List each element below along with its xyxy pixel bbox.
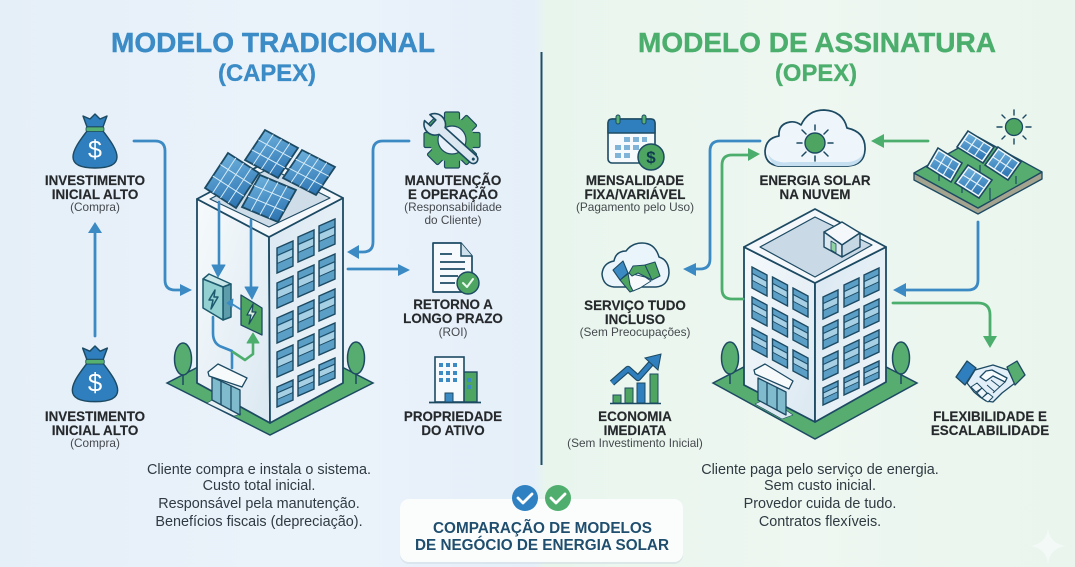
label: retorno: RETORNO A [413,297,493,312]
label: retorno: (ROI) [439,325,467,339]
label: mensalidade: FIXA/VARIÁVEL [585,187,685,202]
trees [174,342,364,385]
label: investimento inicial: INVESTIMENTO [45,173,145,188]
ground [713,330,917,439]
centre divider [540,52,542,465]
label: manutenção: MANUTENÇÃO [405,173,501,188]
building walls [744,209,886,422]
text block: traditional summary: Benefícios fiscais (depreciação). [155,514,363,530]
text block: subscription summary: Provedor cuida de tudo. [744,496,896,512]
building walls [197,160,343,423]
title: traditional model: MODELO TRADICIONAL [111,27,435,58]
icon: document with check [433,243,479,294]
icon: handshake [956,361,1025,402]
label: economia: IMEDIATA [604,423,667,438]
icon: money bag: $ [88,136,102,164]
label: manutenção: E OPERAÇÃO [408,187,498,202]
label: flexibilidade: ESCALABILIDADE [931,423,1049,438]
icon: money bag [73,114,117,168]
label: manutenção: do Cliente) [424,213,482,227]
sparkle mark [1030,528,1066,564]
label: energia solar na nuvem: ENERGIA SOLAR [759,173,871,188]
icon: office property [429,357,481,402]
label: investimento inicial lower [45,409,145,450]
bottom comparison card: COMPARAÇÃO DE MODELOS [433,519,652,537]
entrance [207,364,247,416]
meter box [241,295,262,335]
label: investimento inicial [45,173,145,214]
label: energia solar na nuvem: NA NUVEM [780,187,850,202]
icon: sun [997,110,1031,144]
panel: traditional building [167,130,373,435]
title: traditional model [111,27,435,87]
label: mensalidade: (Pagamento pelo Uso) [576,200,694,214]
title: subscription model: (OPEX) [775,60,857,87]
icon: money bag lower: $ [88,369,102,397]
label: investimento inicial: (Compra) [70,200,120,214]
windows [752,267,879,405]
text block: traditional summary: Responsável pela manutenção. [158,496,360,512]
icon: gear and wrench [420,110,484,170]
label: investimento inicial lower: INVESTIMENTO [45,409,145,424]
entrance [754,364,793,419]
bottom comparison card: DE NEGÓCIO DE ENERGIA SOLAR [415,536,669,554]
label: investimento inicial: INICIAL ALTO [52,187,138,202]
label: serviço: SERVIÇO TUDO [584,298,686,313]
title: traditional model: (CAPEX) [218,60,316,87]
text block: subscription summary: Sem custo inicial. [764,478,876,494]
title: subscription model [638,27,996,87]
icon: money bag lower [72,346,118,402]
text block: traditional summary: Custo total inicial. [203,478,315,494]
label: flexibilidade: FLEXIBILIDADE E [933,409,1047,424]
label: economia: (Sem Investimento Inicial) [567,436,703,450]
text block: subscription summary: Cliente paga pelo serviço de energia. [701,462,939,478]
text block: subscription summary [701,462,939,530]
text block: traditional summary: Cliente compra e instala o sistema. [147,462,371,478]
label: retorno [403,297,503,339]
windows [277,219,335,407]
label: serviço: (Sem Preocupações) [580,325,690,339]
label: mensalidade [576,173,694,214]
arrows: traditional model flow [88,141,410,336]
label: manutenção: (Responsabilidade [404,200,502,214]
icon: cloud with sun [765,110,865,166]
label: mensalidade: MENSALIDADE [586,173,684,188]
label: energia solar na nuvem [759,173,871,202]
label: propriedade [404,409,502,438]
label: serviço [580,298,690,339]
icon: green check [545,485,571,511]
rooftop solar panels [205,130,335,222]
text block: traditional summary [147,462,371,530]
panel: subscription building [713,209,917,439]
ground [167,330,373,435]
label: manutenção [404,173,502,227]
label: retorno: LONGO PRAZO [403,311,503,326]
trees [722,342,910,384]
icon: calendar with coin: $ [646,148,656,167]
label: propriedade: PROPRIEDADE [404,409,502,424]
label: propriedade: DO ATIVO [421,423,485,438]
internal energy arrows [212,202,259,368]
icon: growth chart [610,354,661,404]
icon: blue check [512,485,538,511]
title: subscription model: MODELO DE ASSINATURA [638,27,996,58]
label: investimento inicial lower: (Compra) [70,436,120,450]
rooftop unit [824,222,860,257]
icon: calendar with coin [608,115,664,170]
inverter box [203,274,231,320]
text block: subscription summary: Contratos flexíveis. [759,514,881,530]
label: economia: ECONOMIA [598,409,672,424]
label: economia [567,409,703,450]
icon: solar farm [914,131,1042,214]
arrows: subscription model flow [683,134,997,348]
icon: cloud with handshake [602,243,669,292]
label: investimento inicial lower: INICIAL ALTO [52,423,138,438]
label: flexibilidade [931,409,1049,438]
label: serviço: INCLUSO [605,312,665,327]
bottom comparison card [400,499,683,564]
